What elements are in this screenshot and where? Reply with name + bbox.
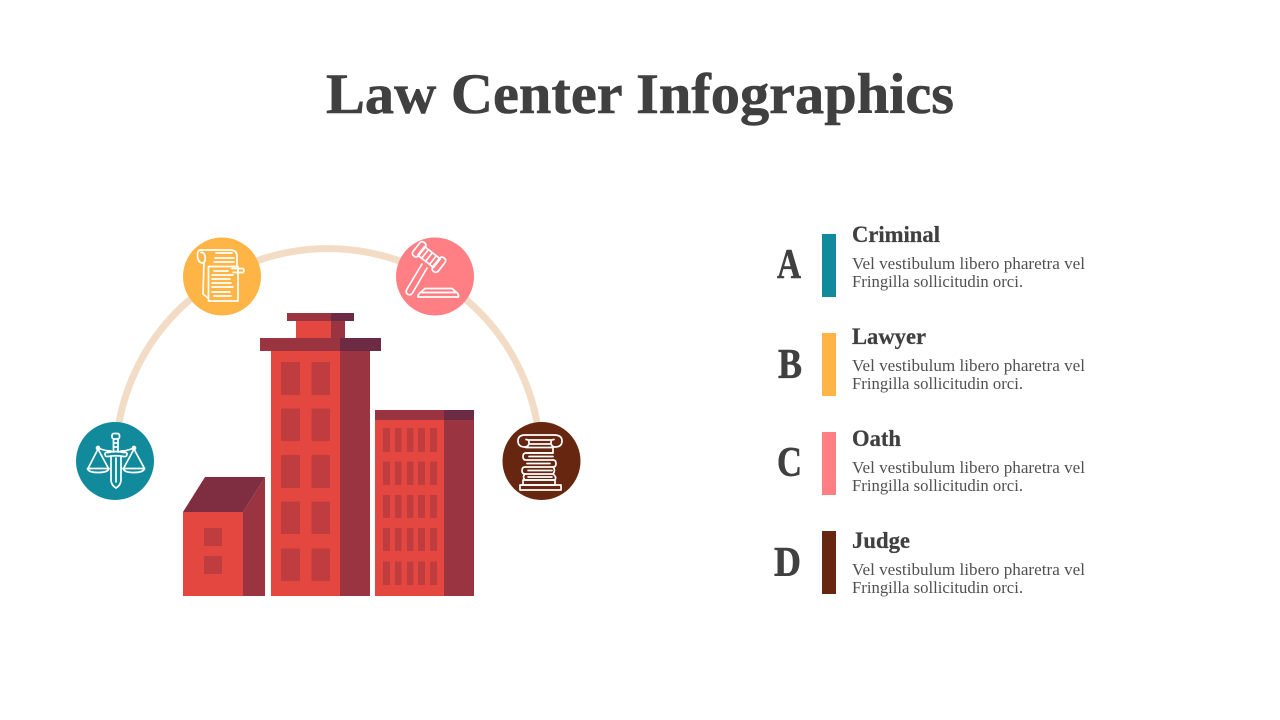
letter C: C bbox=[777, 440, 802, 486]
icon: legal scroll bbox=[183, 238, 261, 316]
description A: Vel vestibulum libero pharetra vel bbox=[852, 254, 1085, 273]
letter A: A bbox=[777, 242, 802, 288]
colour bar A bbox=[822, 234, 836, 297]
description C: Vel vestibulum libero pharetra vel bbox=[852, 458, 1085, 477]
description B: Vel vestibulum libero pharetra vel bbox=[852, 356, 1085, 375]
title: Law Center Infographics bbox=[326, 63, 954, 126]
description B: Fringilla sollicitudin orci. bbox=[852, 374, 1023, 393]
connecting arc bbox=[116, 249, 540, 461]
description D: Vel vestibulum libero pharetra vel bbox=[852, 560, 1085, 579]
heading: Oath: Oath bbox=[852, 426, 901, 451]
legend item B bbox=[778, 324, 1085, 396]
small building bbox=[183, 477, 265, 596]
building illustration bbox=[183, 313, 474, 596]
description D: Fringilla sollicitudin orci. bbox=[852, 578, 1023, 597]
colour bar C bbox=[822, 432, 836, 495]
heading: Judge: Judge bbox=[852, 528, 910, 553]
colour bar B bbox=[822, 333, 836, 396]
colour bar D bbox=[822, 531, 836, 594]
icon: column of books bbox=[502, 422, 580, 500]
heading: Criminal: Criminal bbox=[852, 222, 940, 247]
letter D: D bbox=[774, 540, 801, 586]
description A: Fringilla sollicitudin orci. bbox=[852, 272, 1023, 291]
tall tower bbox=[260, 313, 381, 596]
legend item C bbox=[777, 426, 1085, 495]
legend item A bbox=[777, 222, 1085, 297]
icon: scales and sword bbox=[76, 422, 154, 500]
description C: Fringilla sollicitudin orci. bbox=[852, 476, 1023, 495]
legend item D bbox=[774, 528, 1085, 597]
letter B: B bbox=[778, 342, 802, 388]
icon: gavel bbox=[396, 238, 474, 316]
heading: Lawyer: Lawyer bbox=[852, 324, 926, 349]
right building bbox=[375, 410, 474, 596]
